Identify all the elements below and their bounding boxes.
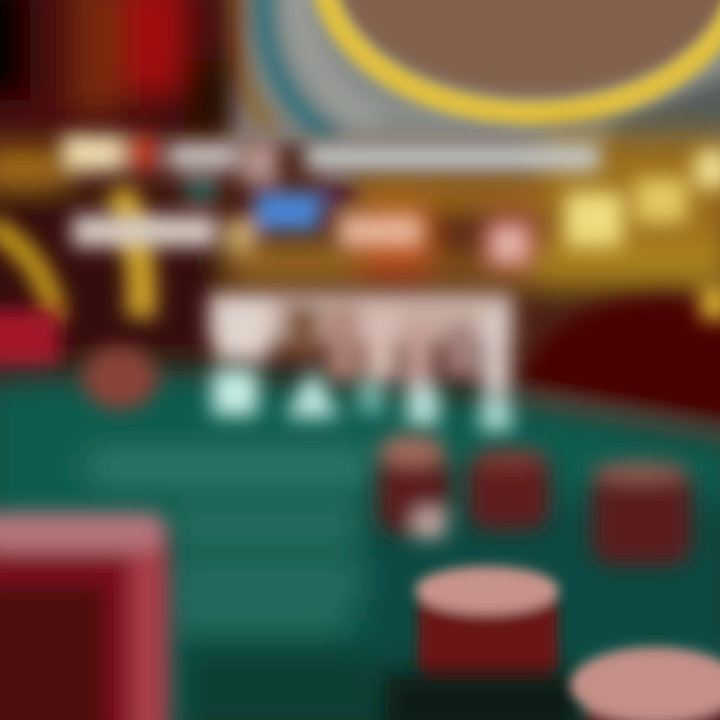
bottom right stool [570, 647, 720, 720]
text-like glowing bands [62, 135, 720, 320]
felt floor [0, 370, 720, 720]
middle wall [0, 135, 720, 380]
red seat left [0, 310, 60, 370]
ceiling dome [327, 0, 720, 100]
front stool [415, 566, 559, 685]
gold arches left [0, 190, 142, 320]
curtains top left [0, 0, 230, 140]
ceiling ring [322, 0, 720, 113]
stools [378, 434, 692, 565]
left small stool [82, 346, 158, 410]
right dark booth [520, 298, 720, 446]
floor shadow under front stool [385, 675, 580, 720]
bottom left chair [0, 512, 170, 720]
ceiling area [225, 0, 720, 165]
row of white figures [208, 292, 513, 432]
